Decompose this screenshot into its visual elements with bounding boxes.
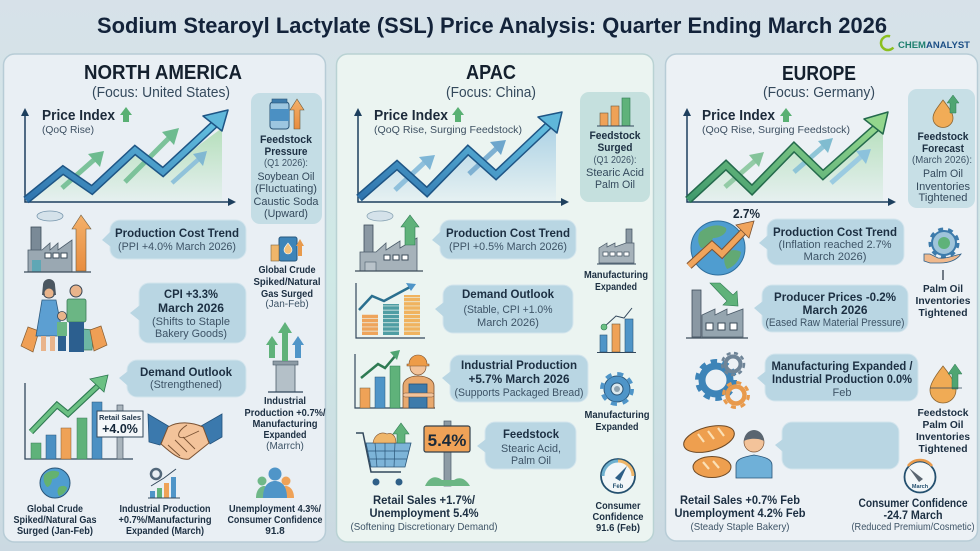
bubble: CPI: Bakery Goods) — [155, 328, 227, 340]
heading: Europe: EUROPE — [782, 63, 856, 85]
icon: globe with orange arrow: 2.7% — [733, 206, 760, 221]
icon: gear — [602, 374, 632, 404]
panel: feedstock pressure: Pressure — [264, 146, 308, 158]
text: global crude caption — [14, 504, 97, 537]
label: price index: (QoQ Rise, Surging Feedstock) — [702, 124, 850, 136]
text: manufacturing expanded — [584, 270, 648, 293]
panel: feedstock pressure: (Upward) — [264, 208, 308, 220]
icon: shopping cart — [356, 423, 411, 486]
icon: factory with down arrow — [686, 283, 748, 338]
text: industrial production: Industrial — [264, 396, 306, 407]
label: price index: Price Index — [702, 108, 775, 124]
bubble: production cost trend — [432, 220, 576, 259]
panel: feedstock forecast: Inventories — [916, 181, 970, 193]
text: global crude caption: Global Crude — [27, 504, 83, 515]
bubble: production cost trend: Production Cost Trend — [115, 226, 239, 240]
bubble: industrial production: Industrial Production — [461, 358, 577, 372]
bubble: CPI — [130, 283, 246, 343]
text: industrial production caption: Expanded (March) — [126, 526, 204, 537]
text: manufacturing expanded: Expanded — [596, 422, 638, 433]
icon: gear and growth bars — [148, 469, 180, 498]
label: price index — [374, 107, 522, 136]
icon: person — [736, 430, 772, 478]
panel: feedstock pressure: (Fluctuating) — [255, 183, 317, 195]
icon: small growth bars — [597, 308, 636, 352]
text: feedstock palm oil: Inventories — [916, 432, 970, 443]
bubble: demand outlook — [119, 360, 246, 397]
text: unemployment caption: Consumer Confidence — [228, 515, 323, 526]
panel: APAC — [336, 54, 654, 542]
icon: factory with orange arrow — [24, 211, 91, 272]
text: global crude: (Jan-Feb) — [265, 299, 309, 310]
text: consumer confidence — [852, 496, 974, 533]
panel: feedstock forecast: (March 2026): — [912, 154, 972, 166]
text: retail sales: (Softening Discretionary Demand) — [350, 521, 498, 533]
heading: APAC: APAC — [466, 62, 516, 84]
panel: feedstock pressure — [251, 93, 322, 224]
bubble: feedstock: Stearic Acid, — [501, 443, 561, 455]
bubble: producer prices: March 2026 — [802, 303, 868, 317]
text: retail sales — [350, 493, 498, 533]
label: price index: Price Index — [42, 108, 115, 124]
bubble: demand outlook: March 2026) — [477, 317, 539, 329]
text: manufacturing expanded: Expanded — [595, 282, 637, 293]
icon: confidence gauge: March — [912, 484, 929, 490]
text: retail sales: Unemployment 5.4% — [370, 506, 479, 520]
bubble: production cost trend: (PPI +4.0% March 2026) — [118, 241, 236, 253]
text: palm oil inventories: Inventories — [916, 296, 971, 307]
panel: feedstock pressure: Feedstock — [260, 134, 313, 146]
bubble: CPI: CPI +3.3% — [164, 287, 218, 301]
text: industrial production caption: +0.7%/Manufacturing — [118, 515, 212, 526]
heading: North America: NORTH AMERICA — [84, 62, 242, 84]
chart: coin stacks — [356, 283, 425, 338]
chart: price index rise — [21, 108, 236, 206]
text: consumer confidence: 91.6 (Feb) — [596, 523, 640, 534]
text: industrial production: Expanded — [264, 430, 306, 441]
text: unemployment caption: 91.8 — [265, 526, 285, 537]
icon: family with shopping bags — [21, 279, 107, 352]
text: industrial production caption — [118, 504, 212, 537]
sign: retail sales +4.0%: Retail Sales — [99, 413, 141, 422]
text: palm oil inventories: Tightened — [918, 308, 968, 319]
text: unemployment caption: Unemployment 4.3%/ — [229, 504, 321, 515]
panel: feedstock forecast: Tightened — [918, 192, 968, 204]
sign: retail sales +4.0% — [97, 411, 143, 437]
text: industrial production: (Marrch) — [266, 441, 304, 452]
panel: feedstock forecast: Forecast — [922, 143, 964, 155]
icon: small factory — [597, 229, 636, 264]
text: consumer confidence: Confidence — [592, 512, 644, 523]
bubble: manufacturing expanded: Industrial Production 0.0% — [772, 372, 912, 386]
text: global crude caption: Surged (Jan-Feb) — [17, 526, 93, 537]
bubble: producer prices: Producer Prices -0.2% — [774, 290, 896, 304]
icon: people — [256, 468, 294, 498]
bubble: manufacturing expanded: Manufacturing Expanded / — [772, 359, 913, 373]
bubble: production cost trend: Production Cost Trend — [773, 225, 897, 239]
text: feedstock palm oil: Palm Oil — [922, 420, 964, 431]
icon: bars — [597, 98, 634, 126]
bubble: feedstock: Feedstock — [503, 427, 559, 441]
bubble: demand outlook: (Strengthened) — [150, 379, 222, 391]
heading: Europe — [763, 63, 875, 101]
bubble: feedstock: Palm Oil — [511, 455, 551, 467]
text: retail sales: Unemployment 4.2% Feb — [674, 506, 806, 520]
label: price index — [702, 108, 850, 136]
text: retail sales — [674, 493, 806, 533]
text: global crude — [254, 265, 321, 310]
text: consumer confidence: Consumer — [596, 501, 641, 512]
panel: feedstock pressure: Caustic Soda — [254, 196, 319, 208]
chart: price index rise — [683, 108, 896, 206]
text: feedstock palm oil: Feedstock — [918, 408, 969, 419]
bubble: demand outlook: Demand Outlook — [462, 287, 554, 301]
heading: North America: (Focus: United States) — [92, 85, 230, 101]
icon: worker — [403, 355, 434, 408]
panel: feedstock pressure: Soybean Oil — [258, 171, 314, 183]
bubble: demand outlook: (Stable, CPI +1.0% — [464, 304, 553, 316]
bubble: manufacturing expanded: Feb — [833, 387, 851, 399]
title: Sodium Stearoyl Lactylate (SSL) Price Analysis: Quarter Ending March 2026 — [97, 13, 887, 38]
text: manufacturing expanded: Manufacturing — [584, 410, 650, 421]
sign: 5.4% — [424, 421, 470, 486]
text: retail sales: (Steady Staple Bakery) — [690, 521, 790, 533]
text: industrial production: Production +0.7%/ — [244, 408, 326, 419]
panel: feedstock surged: Feedstock — [590, 130, 641, 142]
text: global crude: Global Crude — [258, 265, 316, 276]
bubble: demand outlook: Demand Outlook — [140, 365, 232, 379]
bubble: industrial production: (Supports Packaged Bread) — [454, 387, 584, 399]
icon: handshake — [148, 414, 222, 459]
bubble: demand outlook — [435, 285, 573, 333]
label: price index — [42, 107, 132, 136]
icon: gears — [697, 353, 748, 408]
icon: bread loaves — [681, 421, 737, 478]
bubble: producer prices: (Eased Raw Material Pressure) — [766, 317, 904, 329]
text: retail sales: Retail Sales +1.7%/ — [373, 493, 476, 507]
heading: Europe: (Focus: Germany) — [763, 85, 875, 101]
bubble: CPI: (Shifts to Staple — [152, 316, 230, 328]
icon: bottle and arrow — [270, 99, 304, 129]
icon: globe — [40, 468, 70, 498]
text: consumer confidence: -24.7 March — [884, 508, 942, 522]
text: consumer confidence — [592, 501, 644, 534]
sign: 5.4%: 5.4% — [428, 431, 466, 450]
panel: feedstock forecast — [908, 89, 975, 208]
bubble: feedstock — [477, 422, 576, 469]
heading: North America — [84, 62, 242, 101]
panel: feedstock pressure: (Q1 2026): — [264, 157, 308, 169]
icon: globe with orange arrow — [689, 206, 760, 275]
bubble: industrial production — [442, 355, 588, 402]
icon: industrial production arrows — [266, 322, 304, 392]
logo: ChemAnalyst — [878, 33, 970, 53]
text: feedstock palm oil: Tightened — [918, 444, 968, 455]
bubble: production cost trend — [102, 220, 246, 259]
panel: feedstock surged: (Q1 2026): — [594, 154, 636, 166]
panel: Europe — [666, 54, 978, 541]
logo: ChemAnalyst: CHEMANALYST — [898, 40, 970, 51]
bubble: production cost trend: (PPI +0.5% March 2026) — [449, 241, 567, 253]
icon: oil drop and arrow — [933, 95, 959, 128]
panel: feedstock surged: Stearic Acid — [586, 167, 644, 179]
text: retail sales: Retail Sales +0.7% Feb — [680, 493, 800, 507]
panel: feedstock forecast: Palm Oil — [923, 168, 963, 180]
label: price index: Price Index — [374, 108, 448, 124]
bubble: empty — [775, 422, 899, 469]
heading: APAC: (Focus: China) — [446, 85, 536, 101]
text: industrial production: Manufacturing — [252, 419, 318, 430]
bubble: production cost trend: Production Cost Trend — [446, 226, 570, 240]
panel: feedstock surged: Palm Oil — [595, 179, 635, 191]
icon: confidence gauge: Feb — [613, 484, 624, 490]
text: global crude: Spiked/Natural — [254, 277, 321, 288]
bubble: manufacturing expanded — [757, 354, 918, 401]
bubble: producer prices — [754, 285, 908, 332]
panel: feedstock surged: Surged — [598, 142, 632, 154]
text: global crude caption: Spiked/Natural Gas — [14, 515, 97, 526]
label: price index: (QoQ Rise, Surging Feedstock) — [374, 124, 522, 136]
text: feedstock palm oil — [916, 408, 970, 455]
icon: oil drop and green arrow — [930, 364, 962, 403]
icon: factory with green arrow — [355, 211, 423, 271]
bubble: production cost trend: (Inflation reached 2.7% — [778, 239, 892, 251]
bubble: CPI: March 2026 — [158, 301, 224, 315]
heading: APAC — [446, 62, 536, 101]
text: global crude: Gas Surged — [261, 289, 313, 300]
text: industrial production — [244, 396, 326, 452]
text: manufacturing expanded: Manufacturing — [584, 270, 648, 281]
chart: price index rise — [354, 108, 569, 206]
text: palm oil inventories — [916, 284, 971, 319]
text: industrial production caption: Industrial Production — [120, 504, 210, 515]
icon: confidence gauge — [904, 460, 936, 492]
chart: industrial bars and worker — [355, 350, 435, 408]
icon: confidence gauge — [601, 459, 635, 493]
chart: retail sales bars — [25, 375, 143, 459]
text: unemployment caption — [228, 504, 323, 537]
sign: retail sales +4.0%: +4.0% — [102, 422, 138, 436]
text: manufacturing expanded — [584, 410, 650, 433]
text: palm oil inventories: Palm Oil — [923, 284, 963, 295]
bubble: production cost trend: March 2026) — [804, 251, 866, 263]
panel: feedstock surged — [580, 92, 650, 202]
panel: feedstock forecast: Feedstock — [918, 131, 969, 143]
icon: gear in hand — [924, 229, 961, 280]
bubble: industrial production: +5.7% March 2026 — [468, 372, 570, 386]
icon: fuel barrel — [271, 237, 304, 261]
label: price index: (QoQ Rise) — [42, 124, 94, 136]
panel: North America — [4, 54, 326, 542]
bubble: production cost trend — [759, 219, 904, 265]
